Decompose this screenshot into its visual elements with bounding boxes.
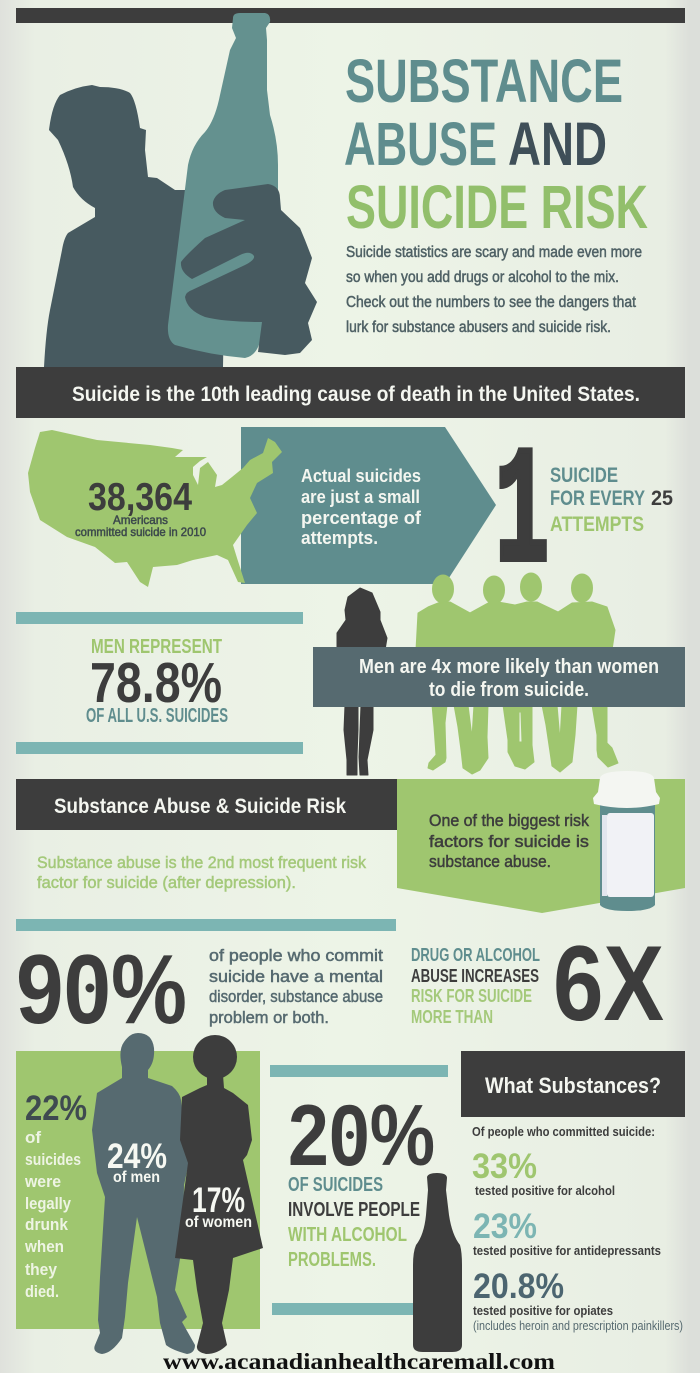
arrow callout: are just a small bbox=[301, 487, 420, 507]
stat: 1 suicide for every 25 attempts: SUICIDE bbox=[550, 464, 618, 487]
man holding bottle illustration bbox=[44, 13, 317, 367]
panel: what substances bbox=[461, 1051, 685, 1333]
arrow callout: attempts. bbox=[301, 528, 378, 548]
arrow callout: percentage of bbox=[301, 508, 422, 528]
arrow callout bbox=[241, 427, 496, 584]
bottle bbox=[168, 13, 278, 358]
risk factor text: Substance abuse is the 2nd most frequent risk bbox=[37, 853, 366, 872]
panel: what substances: Of people who committed suicide: bbox=[472, 1124, 655, 1139]
woman silhouette with stat bbox=[175, 1035, 263, 1354]
stat: 1 suicide for every 25 attempts bbox=[495, 422, 673, 609]
US map with count: Americans bbox=[113, 513, 168, 527]
banner: men 4x more likely bbox=[313, 647, 685, 707]
stat: 20% alcohol problems: 20% bbox=[288, 1088, 435, 1184]
panel: what substances: 33% bbox=[472, 1147, 537, 1186]
stat: 6X: DRUG OR ALCOHOL bbox=[411, 944, 540, 965]
man silhouette with stat: 24% bbox=[107, 1137, 167, 1176]
stat: 20% alcohol problems: INVOLVE PEOPLE bbox=[288, 1199, 420, 1221]
green callout: factors for suicide is bbox=[429, 832, 589, 851]
stat: men represent 78.8% bbox=[16, 612, 303, 754]
divider bar bbox=[16, 919, 396, 931]
man silhouette bbox=[44, 85, 225, 367]
woman silhouette with stat: of women bbox=[185, 1214, 252, 1231]
green panel: legally drunk: legally bbox=[25, 1194, 71, 1213]
intro text: lurk for substance abusers and suicide risk. bbox=[346, 319, 611, 336]
green callout: One of the biggest risk bbox=[429, 811, 589, 830]
stat: 90%: of people who commit bbox=[209, 947, 383, 965]
woman silhouette with stat: 17% bbox=[192, 1181, 245, 1220]
panel: what substances: tested positive for opiates bbox=[473, 1303, 613, 1318]
stat: 90% bbox=[16, 934, 383, 1044]
US map with count bbox=[28, 430, 282, 587]
top bar bbox=[16, 8, 685, 23]
panel: what substances: What Substances? bbox=[485, 1073, 661, 1098]
man silhouette with stat bbox=[92, 1033, 195, 1354]
woman silhouette bbox=[337, 588, 387, 775]
green panel: legally drunk: were bbox=[24, 1172, 61, 1191]
green panel: legally drunk: of bbox=[25, 1128, 41, 1147]
stat: men represent 78.8%: 78.8% bbox=[90, 651, 222, 715]
section heading: Substance Abuse & Suicide Risk bbox=[54, 795, 346, 818]
US map with count: 38,364 bbox=[88, 476, 192, 519]
banner: men 4x more likely: to die from suicide. bbox=[429, 679, 589, 701]
green panel: legally drunk: when bbox=[24, 1237, 64, 1256]
stat: 1 suicide for every 25 attempts: 1 bbox=[495, 422, 549, 609]
stat: 6X: 6X bbox=[553, 923, 664, 1043]
green panel: legally drunk: died. bbox=[25, 1282, 59, 1301]
title: AND bbox=[508, 110, 607, 178]
green callout bbox=[397, 779, 685, 913]
stat: 90%: problem or both. bbox=[209, 1009, 329, 1027]
banner: men 4x more likely: Men are 4x more likely than women bbox=[359, 656, 659, 678]
banner: 10th leading cause: Suicide is the 10th leading cause of death in the United States. bbox=[72, 383, 640, 406]
intro text: Suicide statistics are scary and made even more bbox=[346, 244, 642, 261]
stat: 20% alcohol problems: PROBLEMS. bbox=[288, 1249, 376, 1271]
risk factor text: factor for suicide (after depression). bbox=[37, 873, 296, 892]
stat: 1 suicide for every 25 attempts: FOR EVERY bbox=[550, 487, 645, 510]
stat: 90%: disorder, substance abuse bbox=[209, 988, 383, 1006]
green panel: legally drunk bbox=[16, 1051, 260, 1329]
stat: 90%: 90% bbox=[16, 934, 187, 1044]
section heading bbox=[16, 779, 397, 830]
intro text: so when you add drugs or alcohol to the mix. bbox=[346, 269, 619, 286]
green panel: legally drunk: drunk bbox=[25, 1215, 68, 1234]
green panel: legally drunk: 22% bbox=[25, 1089, 87, 1128]
title bbox=[344, 47, 648, 241]
stat: 20% alcohol problems bbox=[270, 1065, 448, 1315]
group of four men silhouettes bbox=[416, 573, 618, 774]
hand gripping bottle bbox=[181, 184, 317, 355]
panel: what substances: 23% bbox=[473, 1207, 537, 1246]
stat: 6X bbox=[411, 923, 664, 1043]
stat: 6X: MORE THAN bbox=[411, 1006, 493, 1027]
intro text bbox=[346, 244, 642, 336]
panel: what substances: tested positive for antidepressants bbox=[473, 1243, 661, 1258]
risk factor text bbox=[37, 853, 366, 892]
green panel: legally drunk: suicides bbox=[25, 1150, 81, 1169]
title: ABUSE bbox=[344, 110, 497, 178]
bottle silhouette bbox=[413, 1173, 462, 1352]
stat: 90%: suicide have a mental bbox=[209, 968, 383, 986]
panel: what substances: tested positive for alcohol bbox=[475, 1183, 615, 1198]
stat: men represent 78.8%: OF ALL U.S. SUICIDES bbox=[86, 705, 228, 727]
panel: what substances: 20.8% bbox=[473, 1267, 564, 1306]
stat: 1 suicide for every 25 attempts: 25 bbox=[651, 487, 673, 510]
banner: 10th leading cause bbox=[16, 367, 685, 418]
stat: 20% alcohol problems: OF SUICIDES bbox=[288, 1174, 383, 1196]
green panel: legally drunk: they bbox=[25, 1260, 57, 1279]
intro text: Check out the numbers to see the dangers that bbox=[346, 294, 637, 311]
stat: 6X: RISK FOR SUICIDE bbox=[411, 985, 532, 1006]
man silhouette with stat: of men bbox=[113, 1169, 160, 1186]
green callout: substance abuse. bbox=[429, 852, 551, 871]
US map with count: committed suicide in 2010 bbox=[75, 525, 206, 539]
stat: 1 suicide for every 25 attempts: ATTEMPTS bbox=[550, 513, 644, 536]
pill bottle icon bbox=[593, 771, 660, 911]
stat: 6X: ABUSE INCREASES bbox=[411, 965, 539, 986]
arrow callout: Actual suicides bbox=[301, 466, 421, 486]
stat: men represent 78.8%: MEN REPRESENT bbox=[91, 636, 222, 658]
stat: 20% alcohol problems: WITH ALCOHOL bbox=[288, 1224, 407, 1246]
